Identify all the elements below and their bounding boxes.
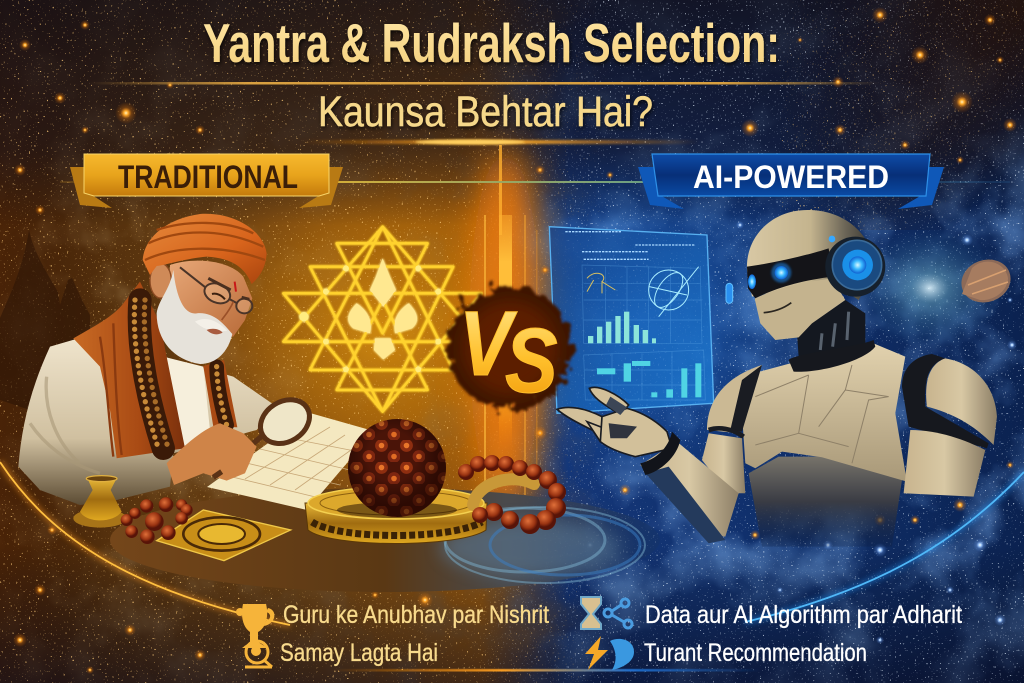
- blue orbit arc: [745, 472, 1024, 622]
- planet: [955, 253, 1017, 309]
- hand: [557, 387, 672, 457]
- beard: [157, 270, 232, 364]
- temple silhouette: [0, 230, 90, 420]
- forearm: [640, 442, 739, 537]
- lower torso: [749, 457, 902, 547]
- section rule: [60, 181, 1010, 183]
- label: Guru ke Anubhav par Nishrit: [283, 601, 549, 629]
- feature: samay lagta hai: [245, 639, 438, 667]
- label: Samay Lagta Hai: [280, 639, 438, 667]
- icon: magnifier person: [245, 641, 272, 667]
- glowing divider: [300, 140, 700, 144]
- collar: [789, 340, 875, 372]
- brow and tilak: [208, 278, 249, 299]
- icon: nodes: [604, 599, 632, 628]
- icon: trophy: [236, 604, 274, 648]
- chest: [742, 343, 907, 482]
- feature: turant recommendation: [585, 636, 867, 670]
- neck: [797, 300, 865, 357]
- shirt: [18, 338, 277, 505]
- rudraksha bead: [337, 419, 457, 518]
- gold orbit arc: [0, 462, 290, 625]
- left upper arm: [702, 433, 745, 493]
- glasses: [180, 267, 252, 313]
- wrist cuff: [640, 432, 680, 475]
- icon: blue shield: [610, 639, 634, 670]
- vs lettering: S: [505, 309, 558, 412]
- banner: ai-powered: [638, 154, 944, 209]
- banner: traditional: [70, 154, 343, 208]
- man: scholar body and head: [18, 214, 277, 505]
- panel text strips: [565, 232, 695, 259]
- feature: data aur ai algorithm: [581, 597, 962, 629]
- hand and magnifying glass: [167, 391, 318, 485]
- robot: [557, 210, 997, 547]
- jaw: [755, 278, 845, 340]
- eyes: [771, 263, 791, 283]
- vest left: [73, 282, 185, 458]
- gold yantra plate: [157, 510, 291, 561]
- face: [168, 261, 252, 337]
- small capsule light: [726, 283, 733, 303]
- nebula: [855, 228, 1005, 348]
- feature: guru ke anubhav: [236, 601, 549, 648]
- ear: [150, 263, 171, 298]
- rudraksh mala: [134, 300, 227, 448]
- title rule: [90, 82, 880, 84]
- bottom glow line: [330, 669, 760, 672]
- central light column: [469, 145, 541, 510]
- banner label: TRADITIONAL: [118, 159, 298, 195]
- shirt front: [163, 357, 210, 447]
- sri yantra: [283, 227, 482, 412]
- banner label: AI-POWERED: [693, 159, 889, 195]
- bead bracelet: [121, 497, 193, 544]
- headphone: [825, 237, 885, 297]
- chart paper: [207, 413, 370, 510]
- right upper arm: [904, 430, 985, 497]
- right arm joint: [902, 354, 989, 448]
- label: Data aur AI Algorithm par Adharit: [645, 601, 962, 629]
- visor: [747, 248, 834, 298]
- vs burst: [448, 286, 572, 412]
- holographic data panel: [549, 227, 733, 413]
- head dome: [747, 210, 874, 300]
- left shoulder: [707, 365, 762, 433]
- label: Turant Recommendation: [644, 639, 867, 667]
- turban: [143, 214, 267, 284]
- constellation sketch: [587, 273, 615, 293]
- vs lettering: V: [459, 292, 512, 395]
- title: Yantra and Rudraksh Selection: Yantra & Rudraksh Selection:: [203, 12, 780, 74]
- radar globe: [649, 267, 699, 317]
- icon: lightning: [585, 636, 608, 670]
- brass vase: [73, 476, 127, 528]
- subtitle: Kaunsa Behtar Hai?: [318, 88, 653, 136]
- bar chart bottom: [597, 361, 701, 398]
- right shoulder: [926, 358, 997, 445]
- curled bead garland: [458, 455, 566, 534]
- table with cosmic rings: [110, 488, 660, 592]
- vest right: [203, 360, 237, 427]
- pedestal: [305, 487, 487, 544]
- bar chart top: [588, 312, 656, 343]
- icon: hourglass: [581, 597, 601, 629]
